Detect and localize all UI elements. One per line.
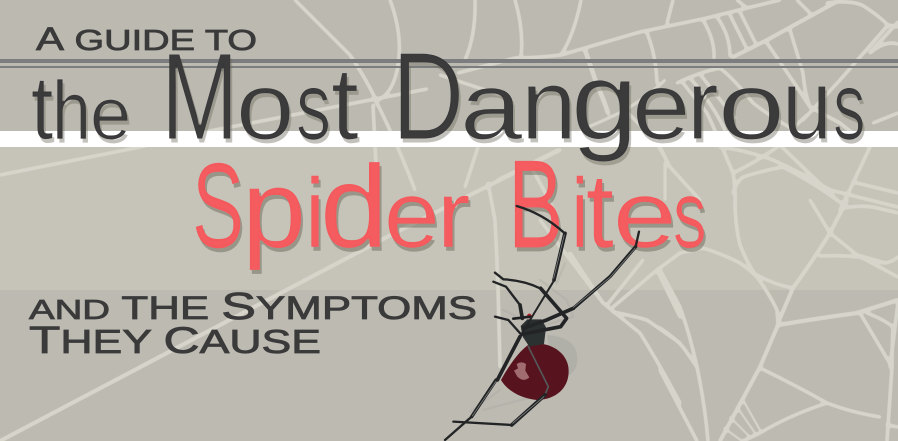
cephalothorax	[521, 319, 546, 347]
heading: Spider Bites: i	[305, 159, 325, 269]
red eye spot	[527, 314, 532, 318]
heading: Spider Bites: e	[384, 162, 440, 268]
heading: the Most Dangerous: n	[521, 49, 577, 161]
heading: Spider Bites: p	[242, 148, 306, 271]
heading: the Most Dangerous: t	[31, 58, 53, 159]
heading: Spider Bites: S	[192, 139, 244, 273]
heading: Spider Bites: B	[508, 135, 563, 274]
background band: lower panel	[0, 290, 898, 441]
legs	[445, 206, 639, 440]
heading: the Most Dangerous: e	[632, 53, 690, 160]
leg highlights	[472, 235, 635, 423]
heading: Spider Bites: i	[571, 159, 589, 269]
background band: middle panel	[0, 147, 898, 290]
hourglass mark	[514, 362, 529, 380]
heading: Spider Bites: r	[437, 161, 470, 268]
illustration: black widow spider	[444, 204, 640, 441]
heading: Spider Bites: e	[613, 162, 676, 268]
heading: the Most Dangerous: o	[718, 53, 785, 160]
heading: Spider Bites: s	[673, 162, 706, 268]
subtitle: and the Symptoms They Cause: THEY C AUSE	[29, 320, 321, 362]
spider shadow	[470, 263, 577, 412]
heading: the Most Dangerous: e	[90, 73, 131, 156]
background band: upper panel	[0, 0, 898, 131]
heading: Spider Bites: t	[586, 152, 614, 270]
subtitle: and the Symptoms They Cause	[28, 286, 477, 362]
heading: the Most Dangerous: g	[571, 40, 638, 163]
heading: Spider Bites	[192, 135, 706, 274]
heading: the Most Dangerous: s	[833, 53, 866, 160]
heading: the Most Dangerous: s	[296, 53, 331, 160]
heading: the Most Dangerous: a	[460, 53, 522, 160]
white stripe	[0, 131, 898, 147]
heading: the Most Dangerous: t	[331, 46, 359, 162]
abdomen	[501, 343, 569, 400]
heading: A Guide to: A GUIDE TO	[36, 21, 257, 57]
heading: Spider Bites: d	[320, 142, 388, 273]
heading: the Most Dangerous: o	[236, 53, 294, 160]
subtitle: and the Symptoms They Cause: AND THE S YMPTOMS	[29, 286, 477, 328]
heading: the Most Dangerous: M	[161, 28, 238, 166]
heading: the Most Dangerous: u	[782, 49, 832, 161]
heading: the Most Dangerous: r	[687, 49, 719, 161]
double rule	[0, 59, 898, 68]
heading: the Most Dangerous	[31, 27, 866, 166]
heading: the Most Dangerous: h	[52, 64, 91, 157]
heading: the Most Dangerous: D	[392, 27, 464, 166]
